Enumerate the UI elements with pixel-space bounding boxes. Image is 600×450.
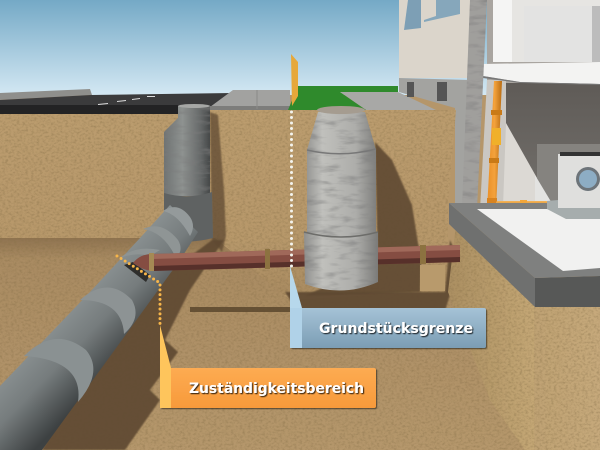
soil back wall	[0, 110, 456, 295]
pit floor	[0, 238, 530, 450]
grass strip	[288, 86, 398, 110]
callout: Grundstücksgrenze	[290, 266, 486, 348]
lit soil patch behind the pipe	[420, 265, 445, 291]
soil side wall under building	[448, 225, 534, 450]
road and pavement	[0, 89, 436, 114]
white dotted property boundary line	[290, 112, 293, 268]
orange dotted responsibility line	[117, 256, 160, 325]
large concrete manhole	[304, 106, 378, 291]
small street manhole	[164, 104, 213, 242]
sky background	[0, 0, 600, 95]
soil front face	[534, 305, 600, 450]
callout: Grundstücksgrenze: Grundstücksgrenze	[319, 321, 473, 337]
callout: Zuständigkeitsbereich	[160, 325, 376, 408]
tiled floor	[477, 209, 600, 271]
main sewer pipe	[0, 205, 198, 450]
building facade	[399, 0, 470, 205]
brown connection pipe	[133, 245, 460, 271]
washing machine	[547, 152, 600, 219]
floor slab	[449, 203, 600, 307]
orange house drain pipe	[487, 81, 548, 210]
room interior	[480, 0, 600, 213]
trench shadows	[42, 112, 460, 450]
concrete column	[462, 0, 487, 209]
boundary marker sign	[291, 54, 298, 106]
callout: Zuständigkeitsbereich: Zuständigkeitsbereich	[189, 381, 364, 397]
